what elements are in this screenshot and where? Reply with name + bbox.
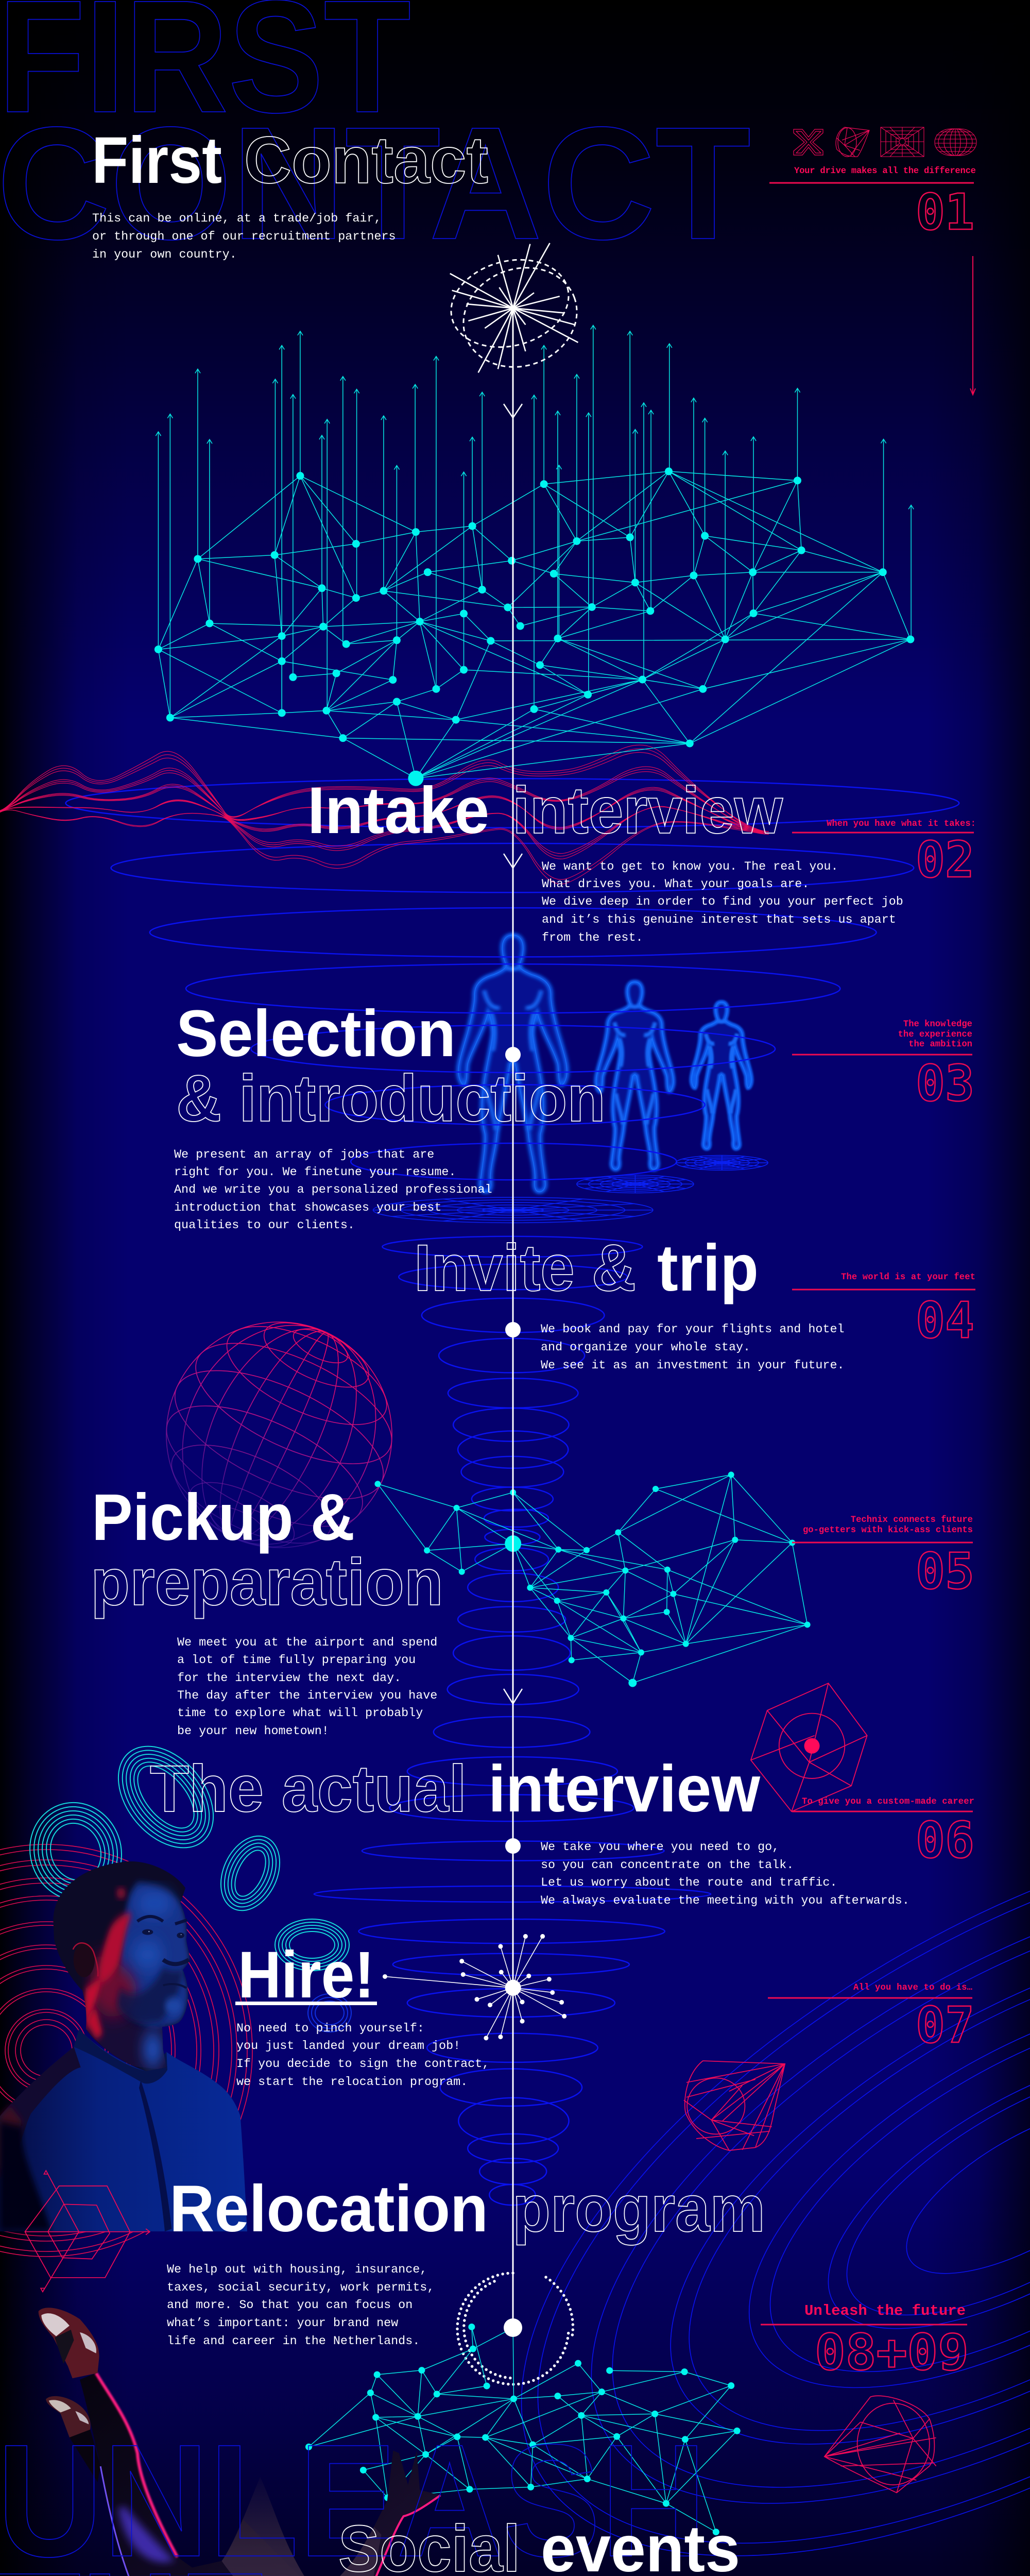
body text: If you decide to sign the contract,: [236, 2058, 489, 2071]
heading: The actual interview: The actual: [150, 1752, 467, 1826]
body text: We dive deep in order to find you your perfect job: [542, 895, 903, 909]
icon: wireframe sphere: [935, 129, 976, 156]
body text: And we write you a personalized professional: [174, 1183, 492, 1197]
heading: Relocation program: Relocation: [169, 2172, 488, 2246]
body text: We always evaluate the meeting with you afterwards.: [541, 1894, 909, 1908]
callout 07: All you have to do is…: [853, 1983, 972, 1993]
background word: FIRST CONTACT: [0, 0, 751, 273]
body text: in your own country.: [92, 248, 237, 262]
rear leg and shoe: [46, 2396, 100, 2482]
body text: [92, 212, 396, 262]
callout 05: Technix connects future: [851, 1515, 973, 1525]
body text: Let us worry about the route and traffic.: [541, 1876, 837, 1890]
body text: We help out with housing, insurance,: [167, 2263, 427, 2277]
body text: [174, 1148, 492, 1232]
pink wireframe cube with target dot: [751, 1683, 867, 1811]
body text: [542, 860, 903, 945]
section 07: Hire!: [235, 1938, 489, 2089]
large blue orbit rings lower right: [405, 1674, 1030, 2576]
body text: what’s important: your brand new: [167, 2317, 398, 2330]
heading: First Contact: [92, 124, 488, 197]
head and neck: [54, 1861, 190, 2071]
body text: and it’s this genuine interest that sets us apart: [542, 913, 896, 927]
timeline node dots: [504, 1047, 522, 2337]
portrait: man in profile with red and blue light: [0, 1855, 247, 2231]
section 03: Selection & introduction: [174, 997, 606, 1232]
ear: [73, 1942, 98, 1977]
purple highlights: [118, 2506, 266, 2576]
heading: First Contact: First: [92, 124, 222, 197]
pink concentric rings behind portrait: [0, 1844, 252, 2257]
callout 02: 02: [916, 831, 974, 889]
heading: Relocation program: [169, 2172, 765, 2246]
callout 03: [792, 1020, 974, 1112]
body text: [541, 1841, 909, 1908]
central column of blue ellipses: upper: [66, 778, 959, 957]
body text: life and career in the Netherlands.: [167, 2335, 420, 2348]
upward arrows rising from network nodes: [156, 325, 914, 718]
callout 01: Your drive makes all the difference: [794, 166, 976, 176]
central column of blue ellipses: middle: [186, 964, 840, 1408]
background word: FIRST CONTACT: CONTACT: [0, 93, 751, 273]
dotted ring around relocation node: [457, 2273, 573, 2384]
body text: [541, 1323, 845, 1372]
heading: Invite & trip: trip: [657, 1231, 759, 1305]
callout 07: 07: [916, 1996, 974, 2054]
body text: time to explore what will probably: [177, 1707, 423, 1720]
heading: Pickup & preparation: [91, 1481, 443, 1619]
body text: What drives you. What your goals are.: [542, 878, 809, 891]
chevron arrows on timeline: [504, 404, 522, 1704]
heading: Pickup & preparation: Pickup &: [92, 1481, 355, 1554]
body text: we start the relocation program.: [236, 2076, 468, 2089]
body text: We present an array of jobs that are: [174, 1148, 434, 1162]
central column of blue ellipses: bottom: [314, 1886, 711, 2205]
heading: Relocation program: program: [512, 2172, 765, 2246]
body text: a lot of time fully preparing you: [177, 1654, 416, 1667]
central column of blue ellipses: lower: [362, 1408, 664, 1860]
body text: This can be online, at a trade/job fair,: [92, 212, 381, 226]
pink wireframe icon row: [794, 127, 976, 157]
body text: or through one of our recruitment partners: [92, 230, 396, 244]
jacket: [221, 2477, 381, 2576]
heading: Hire! with underline: Hire!: [238, 1938, 374, 2012]
callout 03: the ambition: [908, 1040, 972, 1049]
illustration: three blue human figures: [458, 935, 751, 1192]
callout 06: [792, 1797, 974, 1869]
pink and violet rim light: [96, 2373, 177, 2557]
callout 03: the experience: [898, 1030, 972, 1040]
body text: We see it as an investment in your future.: [541, 1359, 845, 1372]
vertical white timeline: [512, 308, 514, 2328]
body text: taxes, social security, work permits,: [167, 2281, 434, 2295]
heading: First Contact: Contact: [244, 124, 488, 197]
heading: The actual interview: [150, 1752, 760, 1826]
heading: Selection & introduction: [176, 997, 606, 1136]
illustration: white starburst with dashed ellipses: [441, 243, 591, 383]
callout 05: 05: [916, 1543, 974, 1600]
eyes, brows and mouth shading: [138, 1917, 189, 1988]
callout 06: 06: [916, 1811, 974, 1869]
icon: perspective grid rectangle: [881, 127, 924, 157]
callout 06: To give you a custom-made career: [802, 1797, 974, 1807]
callout 04: The world is at your feet: [841, 1273, 975, 1282]
callout 01: [769, 166, 976, 241]
heading: The actual interview: interview: [488, 1752, 760, 1826]
heading: Social events: [338, 2512, 740, 2576]
front shoe: [39, 2308, 99, 2378]
body text: We meet you at the airport and spend: [177, 1636, 437, 1650]
icon: wireframe gem: [836, 127, 869, 157]
polar grid disks under the figures: [373, 1156, 768, 1223]
body silhouette: [80, 2373, 440, 2576]
photo: diving athlete: [39, 2308, 440, 2576]
body text: We want to get to know you. The real you.: [542, 860, 838, 874]
body text: you just landed your dream job!: [236, 2040, 460, 2053]
callout 07: [768, 1983, 974, 2054]
callout 01: 01: [916, 183, 974, 241]
section 08: Relocation program: [167, 2172, 765, 2348]
illustration: cyan network with upward arrows: [156, 325, 914, 778]
callout 08+09: Unleash the future: [804, 2302, 966, 2319]
heading: Selection & introduction: & introduction: [176, 1062, 606, 1136]
pink wireframe gem: lower: [825, 2396, 936, 2493]
second cyan network: pickup: [377, 1475, 808, 1683]
hire starburst with dot-tipped spokes: [385, 1936, 564, 2038]
callout 02: When you have what it takes:: [827, 819, 976, 829]
section 01: First Contact: [92, 124, 488, 262]
callout 04: [792, 1273, 975, 1349]
callout 04: 04: [916, 1292, 974, 1349]
heading: Intake interview: interview: [512, 774, 783, 848]
callout 05: [792, 1515, 974, 1600]
network edges: [158, 471, 911, 778]
callout 02: [792, 819, 976, 889]
body text: from the rest.: [542, 931, 643, 945]
body text: [236, 2022, 489, 2089]
body text: and more. So that you can focus on: [167, 2299, 413, 2312]
body text: We take you where you need to go,: [541, 1841, 779, 1854]
network nodes: [158, 471, 911, 743]
heading: Selection & introduction: Selection: [176, 997, 456, 1071]
body text: introduction that showcases your best: [174, 1201, 441, 1215]
callout 05: go-getters with kick-ass clients: [803, 1526, 973, 1535]
cyan spiral coils: [16, 1728, 351, 2032]
red arrow pointing down at right: [970, 256, 975, 395]
body text: right for you. We finetune your resume.: [174, 1166, 456, 1179]
section 02: Intake interview: [307, 774, 903, 945]
heading: Invite & trip: Invite &: [414, 1231, 636, 1305]
heading: Invite & trip: [414, 1231, 759, 1305]
heading: Pickup & preparation: preparation: [91, 1546, 443, 1619]
body text: so you can concentrate on the talk.: [541, 1859, 794, 1872]
callout 08+09: 08+09: [815, 2324, 969, 2381]
body text: [167, 2263, 434, 2348]
callout 03: The knowledge: [903, 1020, 972, 1029]
body text: for the interview the next day.: [177, 1672, 401, 1685]
body text: We book and pay for your flights and hotel: [541, 1323, 845, 1336]
pink wireframe hexagon cube with arrows: [25, 2171, 150, 2292]
body text: be your new hometown!: [177, 1725, 329, 1738]
pink wireframe gem: upper: [684, 2061, 785, 2150]
icon: wireframe X: [794, 129, 823, 155]
section 06: The actual interview: [150, 1752, 909, 1908]
shirt: [0, 2029, 247, 2231]
body text: and organize your whole stay.: [541, 1341, 750, 1354]
heading: Intake interview: [307, 774, 783, 848]
body text: The day after the interview you have: [177, 1689, 437, 1703]
illustration: pink wave mesh: [0, 745, 769, 884]
body text: No need to pinch yourself:: [236, 2022, 424, 2036]
section 04: Invite & trip: [414, 1231, 845, 1372]
third cyan network: social events: [308, 2327, 737, 2532]
body text: [177, 1636, 437, 1738]
illustration: pink wireframe globe: [129, 1285, 429, 1585]
callout 08+09: [761, 2302, 969, 2381]
callout 03: 03: [916, 1055, 974, 1112]
body text: qualities to our clients.: [174, 1219, 355, 1232]
section 09: Social events: [336, 2512, 768, 2576]
heading: Intake interview: Intake: [307, 774, 489, 848]
section 05: Pickup & preparation: [91, 1481, 443, 1738]
